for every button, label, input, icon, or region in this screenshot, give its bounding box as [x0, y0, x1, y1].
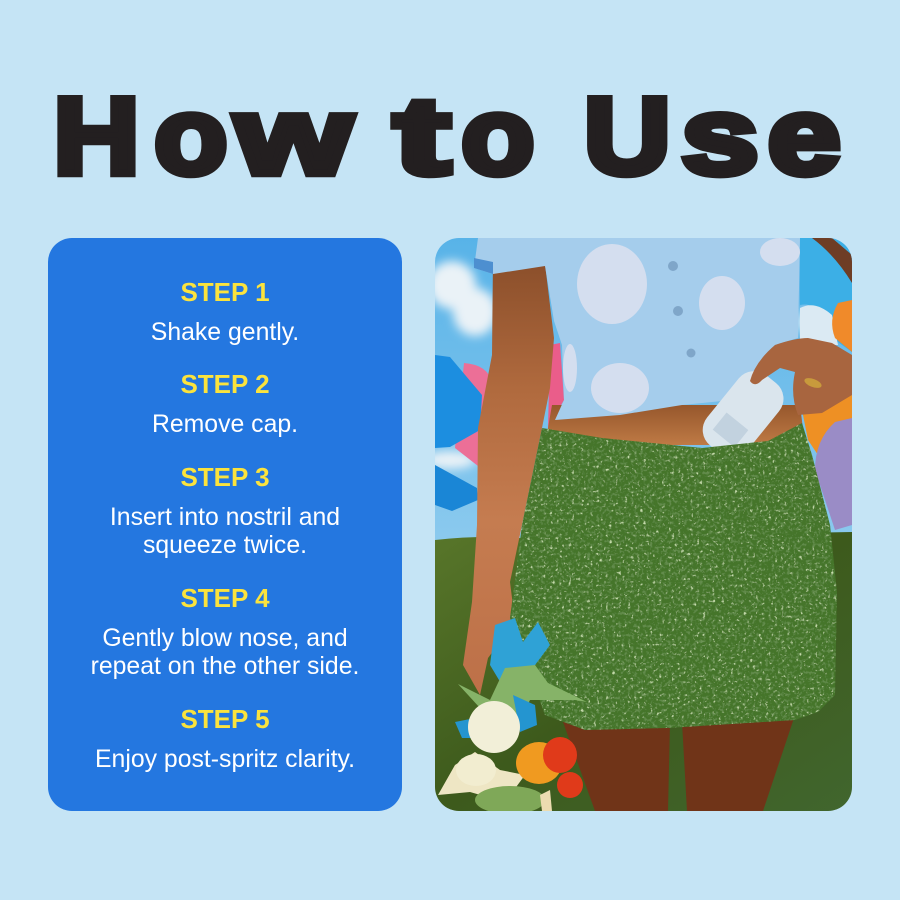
step 4 text	[91, 625, 359, 680]
title	[54, 76, 842, 198]
panel: steps	[48, 238, 402, 811]
clouds	[424, 261, 833, 469]
sky background	[435, 238, 852, 548]
title: t	[394, 76, 450, 198]
legs	[563, 715, 795, 811]
step 1 heading: STEP 1	[180, 277, 270, 307]
title: s	[681, 76, 759, 198]
sleeve shadow	[474, 258, 493, 274]
title: o	[154, 76, 227, 198]
step 1 text: Shake gently.	[151, 319, 299, 346]
background paper flowers	[435, 238, 852, 530]
title: o	[461, 76, 534, 198]
blouse	[474, 238, 800, 420]
blouse embroidery	[563, 238, 800, 413]
bouquet	[438, 618, 587, 814]
step 3 text	[110, 504, 340, 559]
step 3 text: squeeze twice.	[143, 532, 307, 559]
skirt	[510, 423, 837, 730]
step 3 text: Insert into nostril and	[110, 504, 340, 531]
step 4 text: Gently blow nose, and	[102, 625, 348, 652]
step 5 heading: STEP 5	[180, 704, 270, 734]
step 4 text: repeat on the other side.	[91, 653, 359, 680]
step 5 text: Enjoy post-spritz clarity.	[95, 746, 355, 773]
title: e	[768, 76, 841, 198]
title: U	[584, 76, 671, 198]
blouse buttons	[668, 261, 696, 358]
left arm and hand	[463, 258, 554, 695]
hand holding product	[750, 338, 852, 415]
step 2 text: Remove cap.	[152, 411, 298, 438]
step 2 heading: STEP 2	[180, 369, 270, 399]
ring	[804, 378, 822, 388]
step 3 heading: STEP 3	[180, 462, 270, 492]
midriff	[545, 405, 805, 445]
product bottle	[702, 371, 784, 447]
title: H	[54, 76, 140, 198]
photo: woman in grass skirt holding flowers and product	[435, 238, 852, 811]
step 4 heading: STEP 4	[180, 583, 270, 613]
upper arm on the right	[812, 238, 852, 283]
title: w	[234, 76, 352, 198]
grass field	[435, 532, 852, 811]
